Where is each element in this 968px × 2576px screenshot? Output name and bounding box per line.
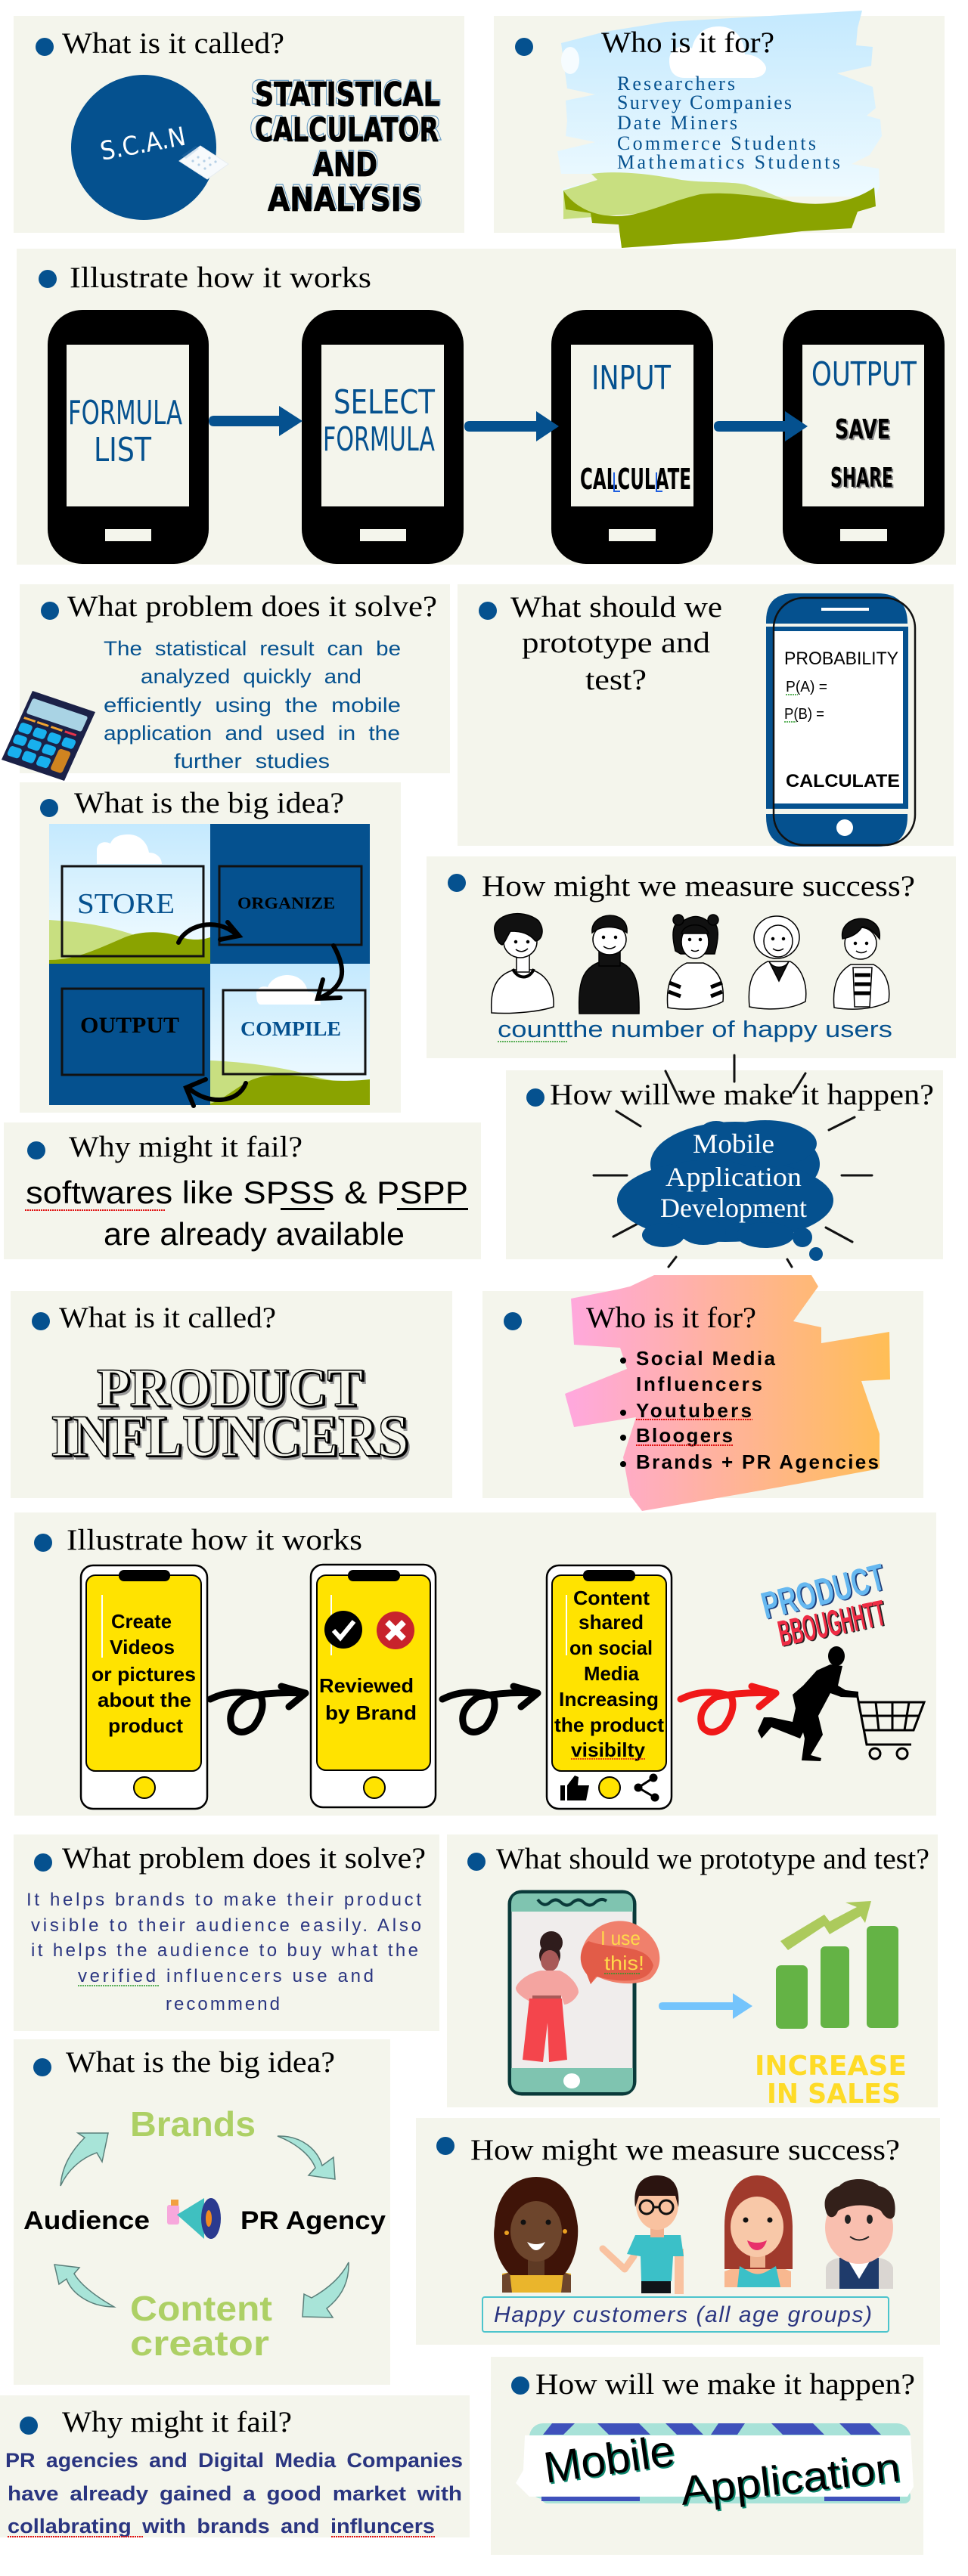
body text: visible to their audience easily. Also xyxy=(31,1915,421,1936)
heading: what should we prototype and test: prototype and xyxy=(522,627,711,659)
phone: input and calculate xyxy=(551,310,713,564)
phone: output, save and share: SHARE xyxy=(830,463,893,494)
phone: output, save and share: OUTPUT xyxy=(811,355,917,394)
body text: PR agencies and Digital Media Companies xyxy=(5,2449,463,2472)
box: output xyxy=(62,989,203,1075)
phone: select formula xyxy=(302,310,464,564)
arrow: store to organize xyxy=(178,922,239,943)
body text: recommend xyxy=(166,1994,280,2014)
product name: statistical calculator and analysis: AND xyxy=(313,146,377,184)
caption: increase in sales: INCREASE xyxy=(755,2051,907,2082)
body text xyxy=(26,1890,421,2014)
person: woman with dark curly hair xyxy=(494,2177,578,2293)
body text: softwares like SPSS & PSPP xyxy=(26,1175,468,1210)
heading: why might it fail: Why might it fail? xyxy=(69,1131,302,1163)
box: organize: ORGANIZE xyxy=(237,893,335,912)
phone: select formula: SELECT xyxy=(334,383,435,422)
audience list: Social Media xyxy=(636,1347,776,1370)
person: man with glasses xyxy=(603,2175,684,2294)
phone: formula list xyxy=(48,310,209,564)
heading: what should we prototype and test: test? xyxy=(585,664,647,696)
heading: what is the big idea: What is the big idea? xyxy=(74,787,344,819)
phone: input and calculate: INPUT xyxy=(591,359,671,398)
illustration: pink-orange brush stroke xyxy=(565,1275,890,1511)
icon: calculator xyxy=(2,691,95,781)
product name: statistical calculator and analysis: CALCULATOR xyxy=(255,111,439,150)
product name: product influncers: PRODUCT xyxy=(98,1358,365,1419)
banner: mobile application: Mobile xyxy=(541,2426,678,2493)
icon: man running with shopping cart xyxy=(758,1646,924,1761)
label: product bought xyxy=(757,1556,891,1655)
arrow: curved xyxy=(302,2262,349,2317)
cloud: mobile application development: Mobile xyxy=(693,1129,774,1159)
box: compile: COMPILE xyxy=(240,1017,341,1040)
icon: share xyxy=(635,1775,658,1800)
audience list xyxy=(617,73,840,173)
phone: probability calculator screen: PROBABILITY xyxy=(784,649,898,669)
body text: efficiently using the mobile xyxy=(104,694,401,717)
product name: product influncers xyxy=(51,1358,411,1472)
body text: have already gained a good market with xyxy=(8,2482,462,2505)
panel: what is it called (product influencers) xyxy=(11,1291,452,1498)
body text: verified influencers use and xyxy=(78,1966,374,1986)
panel: who is it for (influencers) xyxy=(482,1275,923,1511)
arrow: curly xyxy=(442,1686,538,1732)
caption: happy customers xyxy=(482,2297,889,2332)
bar chart: growth xyxy=(776,1901,898,2029)
panel: how will we make it happen (mobile application banner) xyxy=(491,2357,923,2555)
heading: what is the big idea: What is the big idea? xyxy=(66,2046,335,2079)
heading: who is it for xyxy=(515,26,774,59)
heading: who is it for: Who is it for? xyxy=(586,1302,756,1334)
icon: approve check xyxy=(324,1611,362,1649)
icon: reject cross xyxy=(377,1612,414,1649)
banner: mobile application: Application xyxy=(678,2444,903,2514)
audience list: Brands + PR Agencies xyxy=(636,1451,879,1473)
phone: output, save and share: SAVE xyxy=(836,416,892,447)
rays around cloud xyxy=(594,1055,872,1267)
phone: content shared on social media: on social xyxy=(569,1636,653,1659)
arrow xyxy=(209,406,302,436)
illustration: landscape brush stroke xyxy=(557,11,882,248)
label: content creator: creator xyxy=(130,2324,269,2363)
heading: what problem does it solve: What problem does it solve? xyxy=(67,590,437,623)
phone: influencer with speech bubble xyxy=(510,1892,659,2094)
phone: content shared on social media: the product xyxy=(554,1714,664,1736)
phone: output, save and share: SHARE xyxy=(832,464,895,495)
label: content creator xyxy=(130,2289,272,2363)
arrow: red curly xyxy=(681,1686,776,1732)
heading: why might it fail: Why might it fail? xyxy=(62,2406,292,2438)
box: output: OUTPUT xyxy=(80,1013,179,1038)
phone: output, save and share xyxy=(783,310,945,564)
phone: probability calculator screen: P(A) = xyxy=(786,679,827,695)
product name: product influncers: INFLUNCERS xyxy=(52,1404,410,1469)
box: store: STORE xyxy=(77,888,175,920)
phone: input and calculate: CALCULATE xyxy=(580,463,691,496)
heading: how will we make it happen: How will we make it happen? xyxy=(550,1079,934,1111)
process grid xyxy=(49,824,370,1106)
product name: statistical calculator and analysis: ANALYSIS xyxy=(268,178,424,217)
body text xyxy=(25,1175,468,1252)
panel: what should we prototype and test (probability phone) xyxy=(458,584,954,847)
panel: why might it fail (agencies) xyxy=(0,2395,470,2537)
product name: statistical calculator and analysis: AND xyxy=(312,144,379,183)
phone: reviewed by brand xyxy=(311,1565,436,1807)
arrow: compile to output xyxy=(186,1079,246,1106)
banner: mobile application xyxy=(516,2423,914,2516)
audience list: Survey Companies xyxy=(617,91,792,113)
product name: statistical calculator and analysis: STATISTICAL xyxy=(250,74,441,113)
label: PR agency: PR Agency xyxy=(240,2206,386,2235)
panel: what is it called (S.C.A.N) xyxy=(14,16,464,233)
arrow: curved xyxy=(60,2133,108,2186)
product name: product influncers: INFLUNCERS xyxy=(54,1406,411,1472)
panel: who is it for xyxy=(494,11,945,248)
body text xyxy=(104,637,401,772)
arrow: organize to compile xyxy=(318,946,342,999)
caption: countthe number of happy users xyxy=(498,1016,892,1042)
product name: product influncers: INFLUNCERS xyxy=(51,1403,408,1469)
arrow xyxy=(659,1993,752,2019)
phone: content shared on social media: shared xyxy=(579,1611,644,1633)
body text: collabrating with brands and influncers xyxy=(8,2515,435,2537)
caption: increase in sales xyxy=(755,2051,907,2110)
speech bubble xyxy=(581,1921,659,1984)
phone: formula list: LIST xyxy=(94,431,151,469)
audience list xyxy=(620,1347,879,1473)
phone: create videos: Videos xyxy=(110,1636,175,1658)
heading: what problem does it solve: What problem does it solve? xyxy=(62,1842,426,1875)
arrow: curly xyxy=(210,1686,306,1732)
phone: create videos: about the xyxy=(98,1689,191,1711)
phone: probability calculator screen: CALCULATE xyxy=(786,771,900,791)
people: line-art users xyxy=(492,914,889,1014)
heading: what should we prototype and test xyxy=(479,591,722,696)
label: audience: Audience xyxy=(23,2206,150,2235)
product name: product influncers: PRODUCT xyxy=(97,1358,363,1418)
panel: what is the big idea (store, organize, compile, output) xyxy=(20,782,401,1113)
phone: content shared on social media: Media xyxy=(584,1662,640,1685)
label: content creator: Content xyxy=(130,2289,272,2328)
label: product bought: PRODUCT xyxy=(757,1556,889,1627)
phone: probability calculator screen: P(B) = xyxy=(784,706,824,723)
body text: it helps the audience to buy what the xyxy=(31,1940,418,1961)
arrow: curved xyxy=(278,2136,335,2179)
caption: happy customers: Happy customers (all age groups) xyxy=(494,2302,872,2327)
body text: are already available xyxy=(104,1216,405,1252)
speech bubble: I use xyxy=(600,1927,641,1949)
body text: It helps brands to make their product xyxy=(26,1890,421,1910)
audience list: Youtubers xyxy=(636,1399,752,1422)
body text: The statistical result can be xyxy=(104,637,401,660)
audience list: Researchers xyxy=(617,73,735,94)
label: product bought: PRODUCT xyxy=(759,1556,891,1628)
heading: illustrate how it works: Illustrate how it works xyxy=(70,262,371,294)
body text xyxy=(5,2449,463,2537)
phone: content shared on social media: Content xyxy=(573,1587,650,1609)
heading: who is it for xyxy=(504,1302,756,1334)
body text: analyzed quickly and xyxy=(141,665,361,688)
person: woman with red hair xyxy=(724,2175,793,2287)
panel: how might we measure success (happy customers) xyxy=(416,2118,940,2345)
heading: what should we prototype and test: What should we prototype and test? xyxy=(496,1843,929,1875)
person: boy with curly hair and vest xyxy=(825,2179,895,2289)
phone: formula list: FORMULA xyxy=(68,394,182,432)
body text: application and used in the xyxy=(104,722,400,745)
phone: reviewed by brand: Reviewed xyxy=(319,1674,414,1697)
cloud: mobile application development xyxy=(617,1120,833,1261)
arrow xyxy=(714,411,808,441)
panel: what is the big idea (ecosystem cycle) xyxy=(14,2039,390,2385)
audience list: Mathematics Students xyxy=(617,151,840,173)
label: brands: Brands xyxy=(130,2104,256,2144)
product name: product influncers: PRODUCT xyxy=(100,1361,366,1421)
phone: create videos: Create xyxy=(111,1610,172,1633)
heading: what is it called: What is it called? xyxy=(62,27,284,60)
phone: probability calculator screen xyxy=(766,593,915,847)
panel: how will we make it happen (mobile application development) xyxy=(506,1055,943,1267)
panel: illustrate how it works (calculator app) xyxy=(17,249,956,565)
product name: statistical calculator and analysis xyxy=(250,74,442,219)
cloud: mobile application development: Application xyxy=(666,1162,802,1192)
phone: output, save and share: SAVE xyxy=(835,414,890,445)
phone: create videos xyxy=(81,1565,207,1809)
banner: mobile application: Application xyxy=(680,2446,904,2516)
heading: what is it called: What is it called? xyxy=(59,1302,276,1334)
box: organize xyxy=(219,866,361,945)
product name: statistical calculator and analysis: CALCULATOR xyxy=(250,110,442,148)
body text: further studies xyxy=(174,750,330,772)
audience list: Commerce Students xyxy=(617,132,816,154)
panel: what should we prototype and test (sales) xyxy=(447,1834,938,2110)
phone: reviewed by brand: by Brand xyxy=(325,1701,417,1724)
heading: who is it for: Who is it for? xyxy=(601,26,774,59)
panel: why might it fail (SPSS and PSPP) xyxy=(4,1122,481,1259)
banner: mobile application: Mobile xyxy=(542,2427,679,2494)
arrow: curved xyxy=(54,2265,114,2307)
figure: woman xyxy=(516,1931,579,2062)
heading: illustrate how it works: Illustrate how it works xyxy=(67,1524,362,1556)
panel: how might we measure success (five users) xyxy=(427,856,956,1058)
phone: create videos: or pictures xyxy=(92,1663,196,1686)
arrow xyxy=(464,411,559,441)
phone: select formula: FORMULA xyxy=(323,420,435,459)
panel: what problem does it solve (influencers) xyxy=(14,1834,439,2031)
audience list: Date Miners xyxy=(617,112,737,134)
box: compile xyxy=(223,990,365,1074)
speech bubble: this! xyxy=(604,1952,644,1974)
heading: how might we measure success: How might we measure success? xyxy=(470,2134,900,2166)
box: store xyxy=(62,866,203,956)
panel: illustrate how it works (influencer flow) xyxy=(14,1512,936,1816)
heading: how might we measure success: How might we measure success? xyxy=(482,870,915,903)
phone: content shared on social media xyxy=(547,1565,672,1809)
heading: what should we prototype and test: What should we xyxy=(510,591,722,624)
product name: statistical calculator and analysis: STATISTICAL xyxy=(255,76,440,114)
logo: S.C.A.N circle with calculator xyxy=(71,75,228,220)
heading: how will we make it happen: How will we make it happen? xyxy=(535,2368,915,2401)
product name: statistical calculator and analysis: ANALYSIS xyxy=(268,181,422,219)
phone: create videos: product xyxy=(108,1714,183,1737)
caption: increase in sales: IN SALES xyxy=(767,2079,901,2110)
panel: what problem does it solve (calculator) xyxy=(2,584,450,781)
phone: content shared on social media: visibilty xyxy=(571,1738,646,1761)
phone: content shared on social media: Increasing xyxy=(559,1688,659,1711)
icon: thumbs up xyxy=(560,1776,589,1800)
audience list: Influencers xyxy=(636,1373,762,1395)
audience list: Bloogers xyxy=(636,1424,733,1447)
icon: megaphone xyxy=(167,2198,221,2239)
cloud: mobile application development: Development xyxy=(660,1193,807,1223)
logo: S.C.A.N circle with calculator: S.C.A.N xyxy=(98,122,188,167)
